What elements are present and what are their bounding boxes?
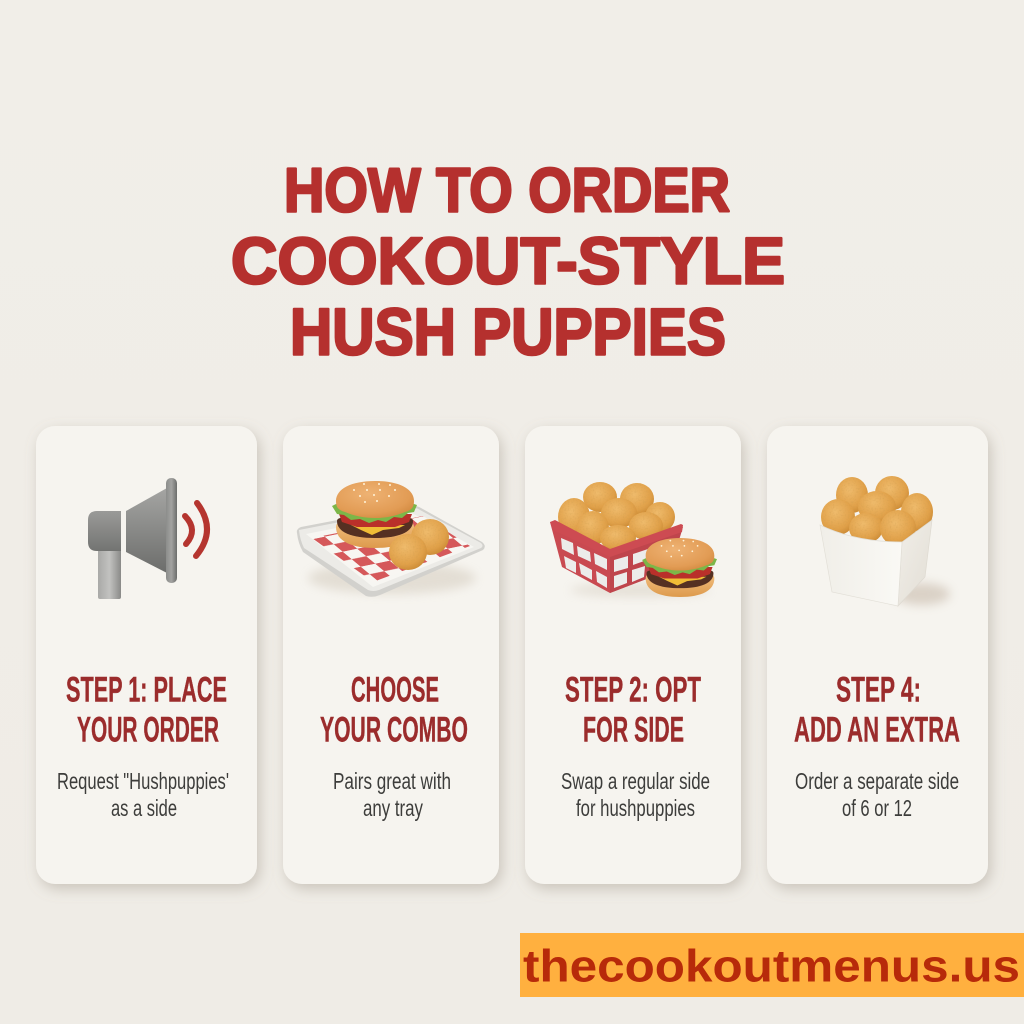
icon: basket of hush puppies with burger [550,482,717,597]
text: step 4 description: Order a separate side [795,768,959,794]
hush puppies in basket [558,482,675,551]
panel: choose your combo [283,426,499,884]
burger beside basket [642,538,717,597]
panel: step 2 opt for side [525,426,741,884]
text: step 1 description [57,768,229,821]
heading: choose your combo: YOUR COMBO [320,710,468,750]
text: combo description [333,768,451,821]
title: HOW TO ORDER [284,156,730,226]
hush puppies [389,519,449,570]
text: step 1 description: as a side [111,795,177,821]
text: step 2 description: Swap a regular side [561,768,710,794]
heading: step 1: STEP 1: PLACE [66,670,227,710]
icon: burger on checkered tray [297,481,485,597]
title: HUSH PUPPIES [290,294,726,368]
heading: step 1 [66,670,227,750]
text: combo description: Pairs great with [333,768,451,794]
title [231,156,785,368]
heading: step 4 [794,670,960,750]
title: COOKOUT-STYLE [231,224,785,298]
text: step 2 description [561,768,710,821]
heading: step 2 [565,670,701,750]
heading: step 2: FOR SIDE [583,710,684,750]
heading: choose your combo [320,670,468,750]
text: step 2 description: for hushpuppies [576,795,695,821]
icon: megaphone [88,478,207,599]
heading: choose your combo: CHOOSE [351,670,439,710]
website banner: thecookoutmenus.us [523,940,1020,992]
panel: step 1 place your order [36,426,257,884]
panel: step 4 add an extra [767,426,988,884]
heading: step 1: YOUR ORDER [77,710,219,750]
text: step 4 description: of 6 or 12 [842,795,912,821]
icon: white box of hush puppies [820,476,950,606]
text: step 4 description [795,768,959,821]
burger [332,481,417,548]
heading: step 2: STEP 2: OPT [565,670,701,710]
text: combo description: any tray [363,795,423,821]
heading: step 4: STEP 4: [836,670,921,710]
hush puppies in box [821,476,933,546]
text: step 1 description: Request "Hushpuppies' [57,768,229,794]
